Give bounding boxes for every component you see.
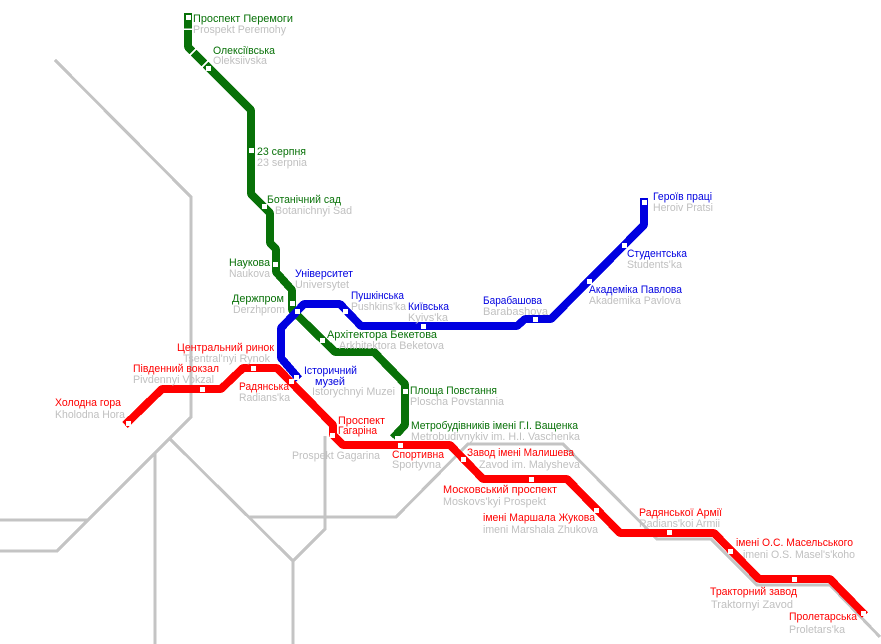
blue line station labels: Героїв праці	[653, 191, 712, 203]
green line station labels	[193, 13, 581, 443]
blue line station labels: Київська	[408, 301, 450, 313]
blue line station labels	[295, 191, 713, 398]
red line station labels: imeni Marshala Zhukova	[483, 524, 599, 536]
blue line station labels: Kyivs'ka	[408, 312, 449, 324]
green line station labels: Олексіївська	[213, 45, 276, 57]
green line station labels: Держпром	[232, 293, 284, 305]
red line station labels: Пролетарська	[789, 611, 858, 623]
red metro line	[125, 368, 865, 615]
blue line station labels: Students'ka	[627, 259, 683, 271]
green line station labels: Oleksiivska	[213, 55, 268, 67]
red line station labels: Traktornyi Zavod	[711, 599, 793, 611]
red line station labels: імені Маршала Жукова	[483, 512, 596, 524]
green line station labels: Arkhitektora Beketova	[339, 340, 445, 352]
red line station labels	[55, 342, 858, 636]
red line station labels: Московський проспект	[443, 484, 557, 496]
blue line station labels: Barabashova	[483, 306, 549, 318]
blue line station labels: музей	[315, 376, 345, 388]
red line station labels: Завод імені Малишева	[467, 447, 575, 459]
blue line station labels: Heroiv Pratsi	[653, 202, 713, 214]
green line station labels: Botanichnyi Sad	[275, 205, 352, 217]
red line station labels: Радянська	[239, 381, 290, 393]
green line station labels: Prospekt Peremohy	[193, 24, 286, 36]
red line station labels: Радянської Армії	[639, 507, 722, 519]
red line station labels: Radians'ka	[239, 392, 291, 404]
green line station labels: Наукова	[229, 257, 271, 269]
green line station labels: Metrobudivnykiv im. H.I. Vaschenka	[411, 431, 581, 443]
blue line station labels: Pushkins'ka	[351, 301, 407, 313]
red line station labels: імені О.С. Масельського	[736, 537, 853, 549]
red line station labels: Moskovs'kyi Prospekt	[443, 496, 546, 508]
red line station labels: Sportyvna	[392, 459, 442, 471]
green line station labels: Derzhprom	[233, 304, 285, 316]
red line station labels: Tsentral'nyi Rynok	[183, 353, 270, 365]
red line station labels: Radians'koi Armii	[639, 518, 720, 530]
red line station labels: Центральний ринок	[177, 342, 274, 354]
red line station labels: Pivdennyi Vokzal	[133, 374, 214, 386]
green line station labels: Ploscha Povstannia	[410, 396, 505, 408]
green line station labels: Проспект Перемоги	[193, 13, 293, 25]
green metro line	[184, 13, 405, 438]
line break ticks	[184, 29, 208, 68]
green line station labels: Архітектора Бекетова	[327, 329, 438, 341]
red line station labels: Спортивна	[392, 449, 445, 461]
blue line station labels: Академіка Павлова	[589, 284, 683, 296]
green line station labels: Ботанічний сад	[267, 194, 342, 206]
red line station labels: Тракторний завод	[710, 586, 798, 598]
blue line station labels: Історичний	[304, 365, 357, 377]
green line station labels: Метробудівників імені Г.І. Ващенка	[411, 420, 579, 432]
blue line station labels: Universytet	[295, 279, 349, 291]
blue line station labels: Akademika Pavlova	[589, 295, 682, 307]
red line station labels: Гагаріна	[338, 425, 378, 437]
green line station labels: Naukova	[229, 268, 271, 280]
red line station labels: Південний вокзал	[133, 363, 219, 375]
station markers	[126, 15, 866, 616]
blue line station labels: Пушкінська	[351, 290, 405, 302]
green line station labels: 23 serpnia	[257, 157, 308, 169]
red line station labels: Проспект	[338, 415, 385, 427]
red line station labels: Zavod im. Malysheva	[479, 459, 581, 471]
red line station labels: Proletars'ka	[789, 624, 846, 636]
red line station labels: Kholodna Hora	[55, 409, 126, 421]
blue line station labels: Університет	[295, 268, 353, 280]
blue metro line	[281, 198, 644, 379]
red line station labels: imeni O.S. Masel's'koho	[743, 549, 855, 561]
blue line station labels: Барабашова	[483, 295, 543, 307]
red line station labels: Холодна гора	[55, 397, 122, 409]
red line station labels: Prospekt Gagarina	[292, 450, 381, 462]
green line station labels: Площа Повстання	[410, 385, 497, 397]
blue line station labels: Студентська	[627, 248, 688, 260]
green line station labels: 23 серпня	[257, 146, 306, 158]
blue line station labels: Istorychnyi Muzei	[312, 386, 395, 398]
